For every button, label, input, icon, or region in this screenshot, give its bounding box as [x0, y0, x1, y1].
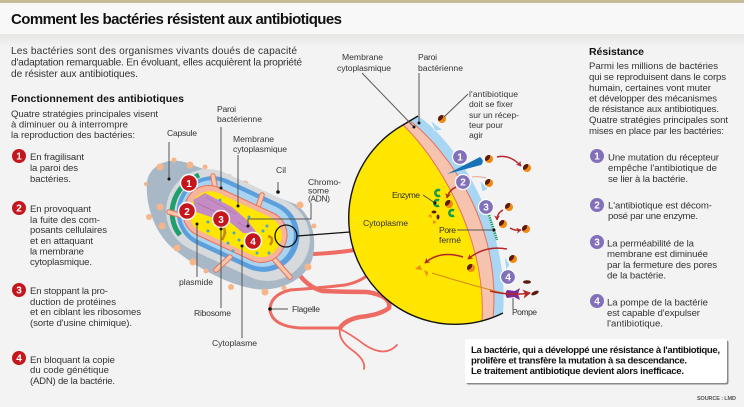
resistance 3	[590, 235, 717, 282]
resistance 3: 3	[594, 238, 600, 248]
enlarged view labels: teur pour	[469, 120, 503, 130]
item 1: paroi: 1	[16, 152, 22, 162]
enlarged view labels: bactérienne	[418, 63, 463, 73]
conclusion callout	[465, 339, 728, 384]
outer green wall segment	[172, 175, 199, 235]
item 3: ribosomes: et en ciblant les ribosomes	[30, 307, 141, 318]
resistance 4: est capable d'expulser	[607, 308, 701, 319]
membrane red edge	[409, 120, 494, 318]
resistance 3: par la fermeture des pores	[607, 260, 717, 271]
item 2: membrane	[12, 201, 107, 268]
bacterium labels	[167, 104, 341, 348]
item 3: ribosomes	[12, 283, 141, 329]
enlarged view labels: cytoplasmique	[337, 63, 391, 73]
heading: fonctionnement des antibiotiques: Fonctionnement des antibiotiques	[11, 93, 184, 105]
item 4: ADN: (ADN) de la bactérie.	[30, 376, 115, 387]
item 1: paroi: la paroi des	[30, 163, 78, 174]
intro text	[11, 46, 302, 80]
resistance 4: l'antibiotique.	[607, 318, 663, 330]
outer wall (blue)	[403, 116, 504, 321]
bacterium labels: Cytoplasme	[212, 338, 257, 348]
red number badges: 1	[186, 179, 192, 190]
resistance intro	[589, 61, 728, 137]
item 4: ADN	[12, 351, 115, 387]
resistance 1: empêche l'antibiotique de	[608, 163, 717, 174]
bacterium	[144, 155, 324, 296]
connector to enlarged view	[297, 232, 350, 236]
bacterium labels: (ADN)	[308, 194, 330, 204]
resistance 1: Une mutation du récepteur	[608, 152, 720, 164]
item 1: paroi: bactéries.	[30, 174, 71, 185]
item 2: membrane: la fuite des com-	[30, 215, 100, 226]
red number badges: 2	[184, 207, 190, 218]
purple number badges: 3	[483, 202, 489, 214]
enlarged view labels: Pompe	[512, 307, 537, 317]
resistance intro: Quatre stratégies principales sont	[589, 115, 728, 126]
ribosomes	[206, 198, 270, 254]
enlarged view labels: Pore	[439, 225, 456, 235]
item 4: ADN: du code génétique	[30, 365, 109, 376]
resistance 2: posé par une enzyme.	[608, 211, 698, 222]
item 2: membrane: En provoquant	[30, 204, 91, 215]
resistance intro: qui se reproduisent dans le corps	[589, 72, 726, 83]
purple number badges: 2	[460, 178, 466, 188]
conclusion callout: prolifère et transfère la mutation à sa descendance.	[471, 356, 687, 366]
item 4: ADN: En bloquant la copie	[30, 355, 115, 366]
flagella	[270, 250, 397, 369]
strategies intro	[11, 109, 158, 141]
enlarged view labels: agir	[469, 130, 483, 140]
enlarged view labels: Paroi	[418, 52, 437, 62]
strategies intro: la reproduction des bactéries:	[11, 130, 135, 141]
resistance 2: L'antibiotique est décom-	[608, 200, 712, 212]
enlarged view labels: fermé	[439, 235, 461, 245]
bacterium labels: bactérienne	[217, 114, 262, 124]
closed pore	[489, 215, 497, 240]
cytoplasm	[183, 185, 288, 264]
intro text: Les bactéries sont des organismes vivants doués de capacité	[11, 46, 297, 57]
bacterium labels: Capsule	[167, 128, 197, 138]
bacterium labels: Paroi	[217, 104, 236, 114]
enzyme pieces	[415, 214, 437, 277]
enzymes	[434, 190, 454, 216]
item 3: ribosomes: 3	[16, 286, 22, 296]
bacterium labels: some	[308, 186, 329, 196]
capsule	[147, 161, 314, 289]
enlarged view labels: doit se fixer	[469, 99, 513, 109]
chromosome	[193, 193, 257, 233]
bacterium labels: Flagelle	[292, 304, 320, 314]
strategies intro: Quatre stratégies principales visent	[11, 109, 158, 120]
receptors	[430, 120, 510, 270]
resistance 4: 4	[594, 296, 600, 308]
resistance intro: de résistance aux antibiotiques.	[589, 104, 719, 115]
enlarged view labels: sur un récep-	[469, 110, 519, 120]
resistance intro: mises en place par les bactéries:	[589, 126, 724, 137]
bacterium labels: plasmide	[179, 277, 213, 287]
resistance 3: de la bactérie.	[607, 270, 666, 282]
resistance intro: humain, certaines vont muter	[589, 83, 712, 94]
item 1: paroi	[12, 149, 84, 185]
bacterium labels: Chromo-	[308, 177, 341, 187]
bacterium labels: Cil	[276, 165, 286, 175]
bacterium labels: Ribosome	[194, 308, 231, 318]
antibiotic particles and arrows	[415, 114, 539, 296]
resistance 4: La pompe de la bactérie	[607, 298, 708, 308]
enlarged view labels	[337, 52, 537, 317]
resistance intro: Parmi les millions de bactéries	[589, 61, 718, 72]
intro text: d'adaptation remarquable. En évoluant, elles acquièrent la propriété	[11, 58, 302, 68]
enlarged view labels: Cytoplasme	[363, 218, 408, 228]
inner red edge	[403, 125, 482, 321]
item 2: membrane: et en attaquant	[30, 236, 93, 247]
enlarged view labels: Membrane	[342, 52, 383, 62]
resistance 2	[590, 198, 712, 222]
item 2: membrane: posants cellulaires	[30, 225, 107, 236]
source: SOURCE : LMD	[697, 396, 736, 402]
item 1: paroi: En fragilisant	[30, 152, 84, 163]
cytoplasm	[348, 125, 482, 325]
resistance 3: membrane est diminuée	[607, 249, 708, 260]
resistance intro: et développer des mécanismes	[589, 94, 717, 104]
item 4: ADN: 4	[16, 354, 22, 364]
conclusion callout: La bactérie, qui a développé une résistance à l'antibiotique,	[471, 345, 720, 356]
purple number badges: 4	[505, 272, 511, 284]
bacterium labels: cytoplasmique	[233, 144, 287, 154]
item 2: membrane: cytoplasmique.	[30, 257, 92, 268]
pump	[506, 288, 520, 300]
bacterium labels: Membrane	[233, 134, 274, 144]
resistance 1: 1	[594, 152, 600, 162]
pili	[169, 176, 290, 277]
enlarged view labels: Enzyme	[392, 190, 420, 200]
intro text: de résister aux antibiotiques.	[11, 69, 138, 80]
item 2: membrane: la membrane	[30, 246, 84, 258]
red number badges: 4	[250, 237, 256, 248]
resistance 3: La perméabilité de la	[607, 238, 695, 250]
conclusion callout: Le traitement antibiotique devient alors inefficace.	[471, 366, 684, 377]
item 3: ribosomes: En stoppant la pro-	[30, 286, 108, 297]
outline	[349, 116, 503, 324]
resistance 1: se lier à la bactérie.	[608, 174, 688, 185]
red number badges: 3	[218, 215, 224, 226]
membrane band	[403, 120, 494, 321]
heading: résistance: Résistance	[589, 46, 644, 58]
plasmid	[222, 226, 272, 245]
enlarged cell wall	[348, 116, 520, 325]
red number badges	[178, 174, 262, 250]
resistance 4	[590, 294, 708, 330]
item 3: ribosomes: duction de protéines	[30, 297, 116, 308]
mutated receptor wedge	[447, 157, 483, 174]
purple number badges	[452, 150, 516, 284]
membrane	[175, 178, 295, 270]
title: Comment les bactéries résistent aux antibiotiques	[11, 11, 342, 28]
item 2: membrane: 2	[16, 204, 22, 214]
enlarged view labels: l'antibiotique	[469, 89, 518, 99]
resistance 1	[590, 149, 720, 185]
zoom circle	[275, 225, 297, 247]
item 3: ribosomes: (sorte d'usine chimique).	[30, 318, 132, 329]
strategies intro: à diminuer ou à interrompre	[11, 120, 128, 130]
purple number badges: 1	[457, 152, 463, 164]
resistance 2: 2	[594, 200, 600, 212]
